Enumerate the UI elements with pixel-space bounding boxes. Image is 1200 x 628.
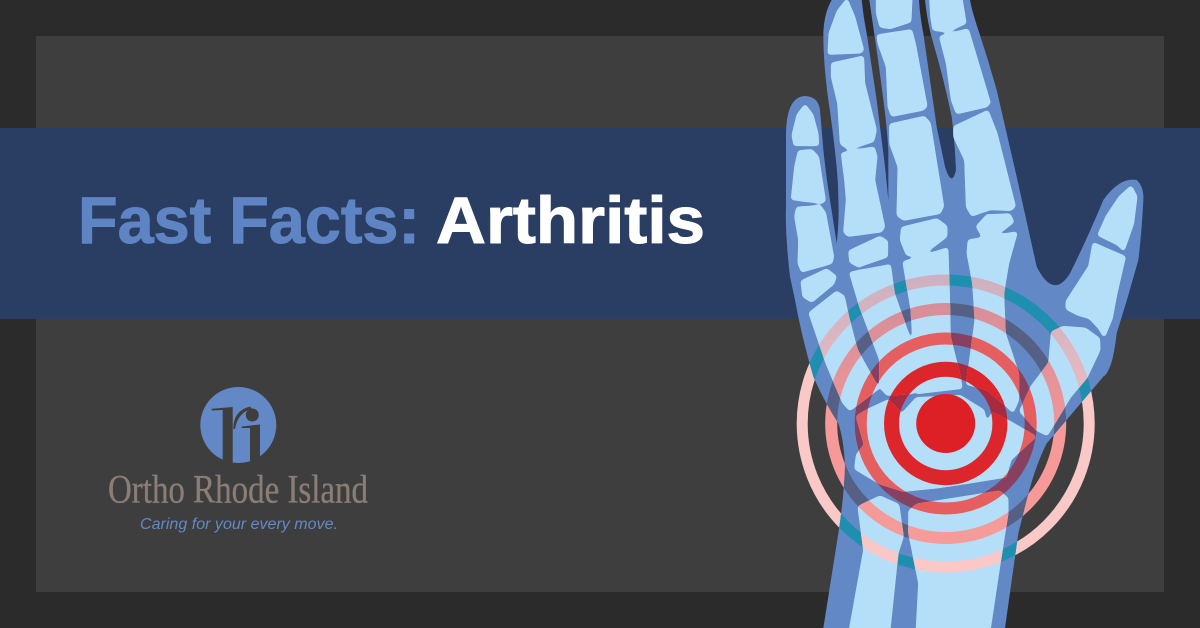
title band <box>0 128 1200 319</box>
icon: logo monogram <box>200 387 276 466</box>
title: Fast Facts: <box>78 183 420 257</box>
title: Arthritis <box>436 183 705 257</box>
pain centre <box>916 394 975 453</box>
pain rings on background <box>802 280 1089 567</box>
hand bones <box>793 0 1136 628</box>
title <box>78 183 705 257</box>
logo: Ortho Rhode Island <box>108 387 368 533</box>
logo tagline: Caring for your every move. <box>140 516 338 533</box>
pain rings over soft tissue <box>802 280 1089 567</box>
logo name: Ortho Rhode Island <box>108 466 368 512</box>
illustration: x-ray hand with pain rings <box>786 0 1143 628</box>
hand silhouette <box>786 0 1143 628</box>
pain rings over bones <box>802 280 1089 567</box>
